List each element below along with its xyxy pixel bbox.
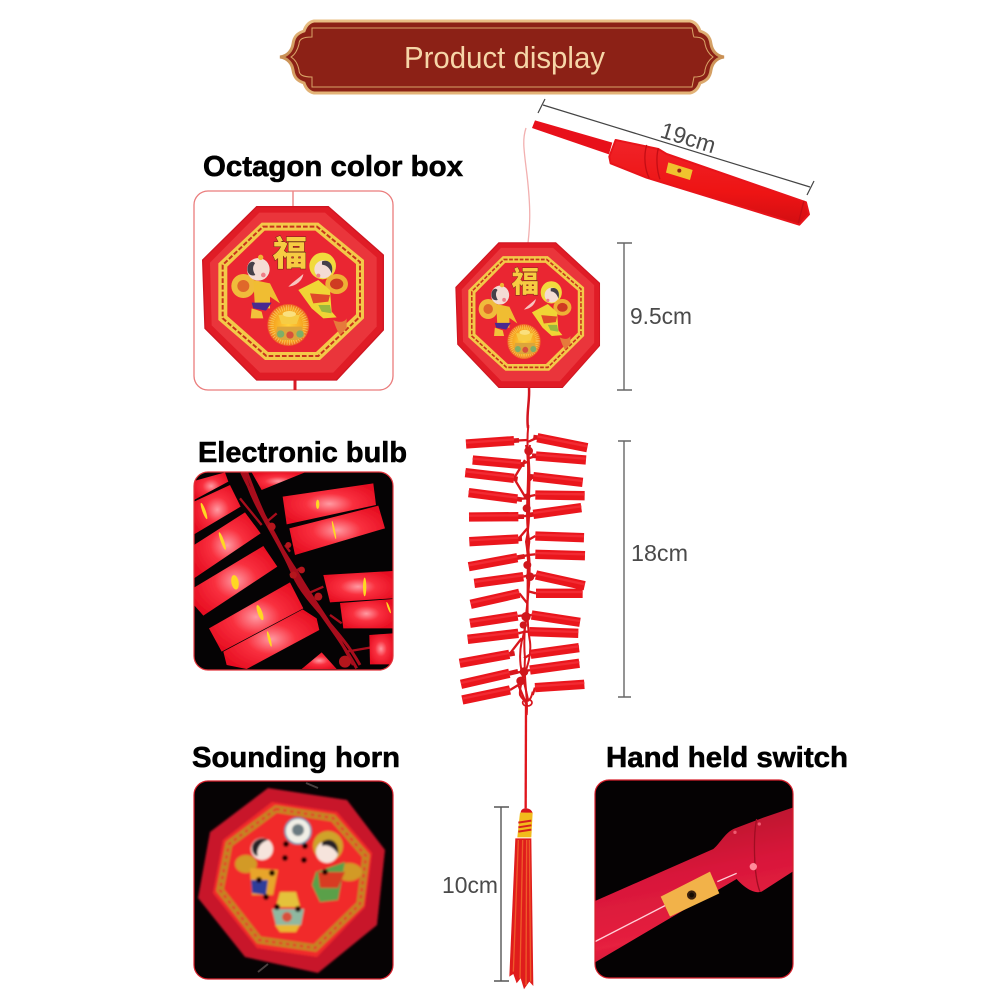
fu character: 福 xyxy=(273,225,307,275)
panel: hand held switch photo xyxy=(595,780,793,978)
cord between octagon and firecrackers xyxy=(527,388,529,428)
tassel xyxy=(509,699,533,989)
heading: electronic bulb: Electronic bulb xyxy=(198,437,407,469)
title text: Product display xyxy=(404,40,605,75)
panel: electronic bulb photo xyxy=(194,472,393,670)
panel border: sounding horn xyxy=(194,781,393,979)
firecracker string xyxy=(460,425,587,715)
right child figure xyxy=(312,831,362,902)
dimension: 19cm: 19cm xyxy=(658,117,719,158)
panel: sounding horn photo xyxy=(194,781,393,979)
dimension: 10cm: 10cm xyxy=(442,872,498,898)
dimension: 9.5cm: 9.5cm xyxy=(630,303,692,329)
sound seal xyxy=(285,818,311,844)
heading: octagon color box: Octagon color box xyxy=(203,151,463,183)
cords and knots xyxy=(509,425,538,715)
yellow switch xyxy=(661,872,719,917)
dimension: 18cm: 18cm xyxy=(631,540,688,566)
tube highlight xyxy=(595,873,737,942)
dimension: 18cm xyxy=(618,441,688,697)
dimension: 19cm xyxy=(538,99,814,195)
panel: octagon color box xyxy=(194,191,393,390)
handle switch xyxy=(666,162,693,180)
handle tube xyxy=(595,808,793,962)
glowing firecracker tubes xyxy=(194,472,393,669)
speaker holes xyxy=(256,841,328,912)
fu character center: 福 xyxy=(512,259,539,301)
handheld switch product xyxy=(532,120,809,225)
tassel threads xyxy=(509,838,533,989)
ingot decoration xyxy=(272,892,304,932)
tassel gold cap xyxy=(521,808,533,813)
heading: sounding horn: Sounding horn xyxy=(192,742,400,774)
center octagon lantern xyxy=(456,243,600,387)
yellow led glints xyxy=(199,500,392,647)
panel border: hand held switch xyxy=(595,780,793,978)
left child figure xyxy=(235,838,278,895)
dimension: 10cm xyxy=(442,807,509,981)
crackers xyxy=(460,438,587,700)
title banner xyxy=(280,21,724,93)
white string to handle xyxy=(524,128,530,243)
panel border: electronic bulb xyxy=(194,472,393,670)
hanging cord stubs xyxy=(292,191,294,207)
heading: hand held switch: Hand held switch xyxy=(606,742,848,774)
dimension: 9.5cm xyxy=(617,243,692,390)
octagon back shell xyxy=(198,788,385,973)
octagon lantern art xyxy=(203,207,383,380)
